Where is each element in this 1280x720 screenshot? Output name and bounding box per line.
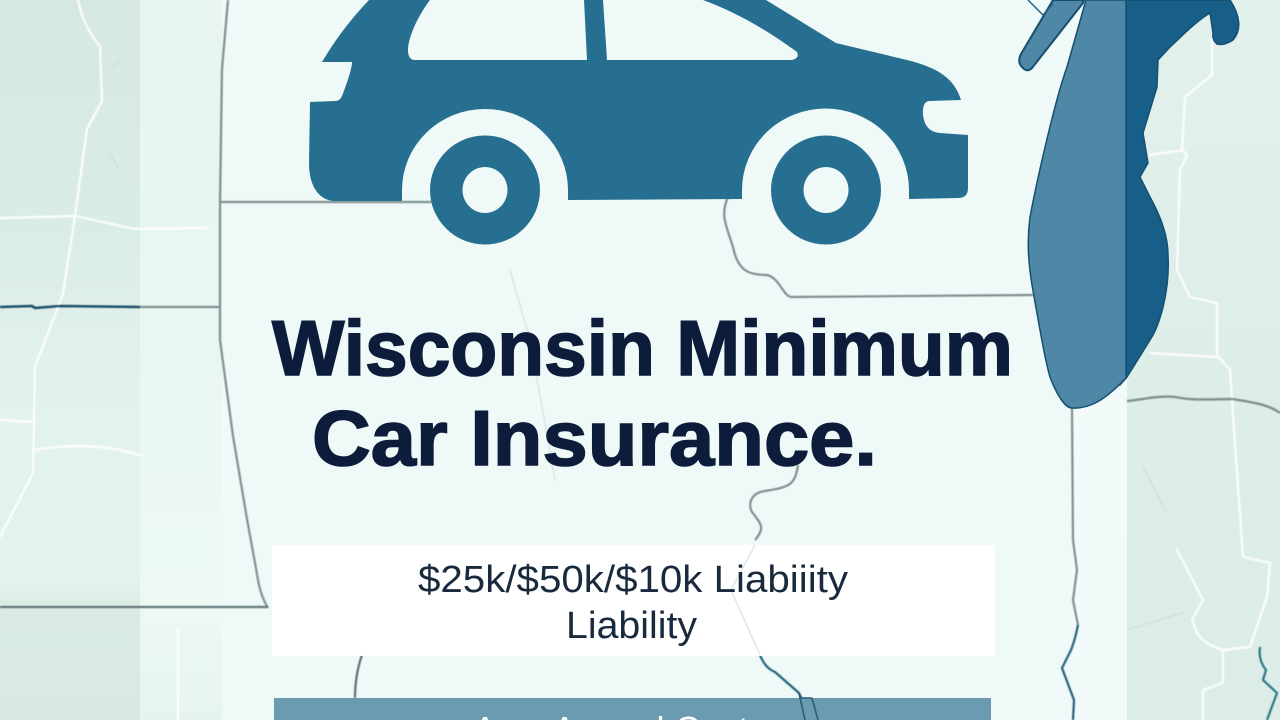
green bay arm xyxy=(1019,0,1084,70)
title: Car Insurance. xyxy=(312,394,877,482)
liability text: $25k/$50k/$10k Liabiiity xyxy=(418,559,848,601)
liability text xyxy=(418,559,848,647)
liability text: Liability xyxy=(566,605,697,647)
title xyxy=(272,304,1013,482)
lake michigan xyxy=(1019,0,1239,408)
panel: liability limits xyxy=(272,545,995,656)
title: Wisconsin Minimum xyxy=(272,304,1013,392)
panel: average annual cost xyxy=(274,693,991,720)
icon: car xyxy=(309,0,968,244)
front and rear wheels xyxy=(430,136,881,244)
